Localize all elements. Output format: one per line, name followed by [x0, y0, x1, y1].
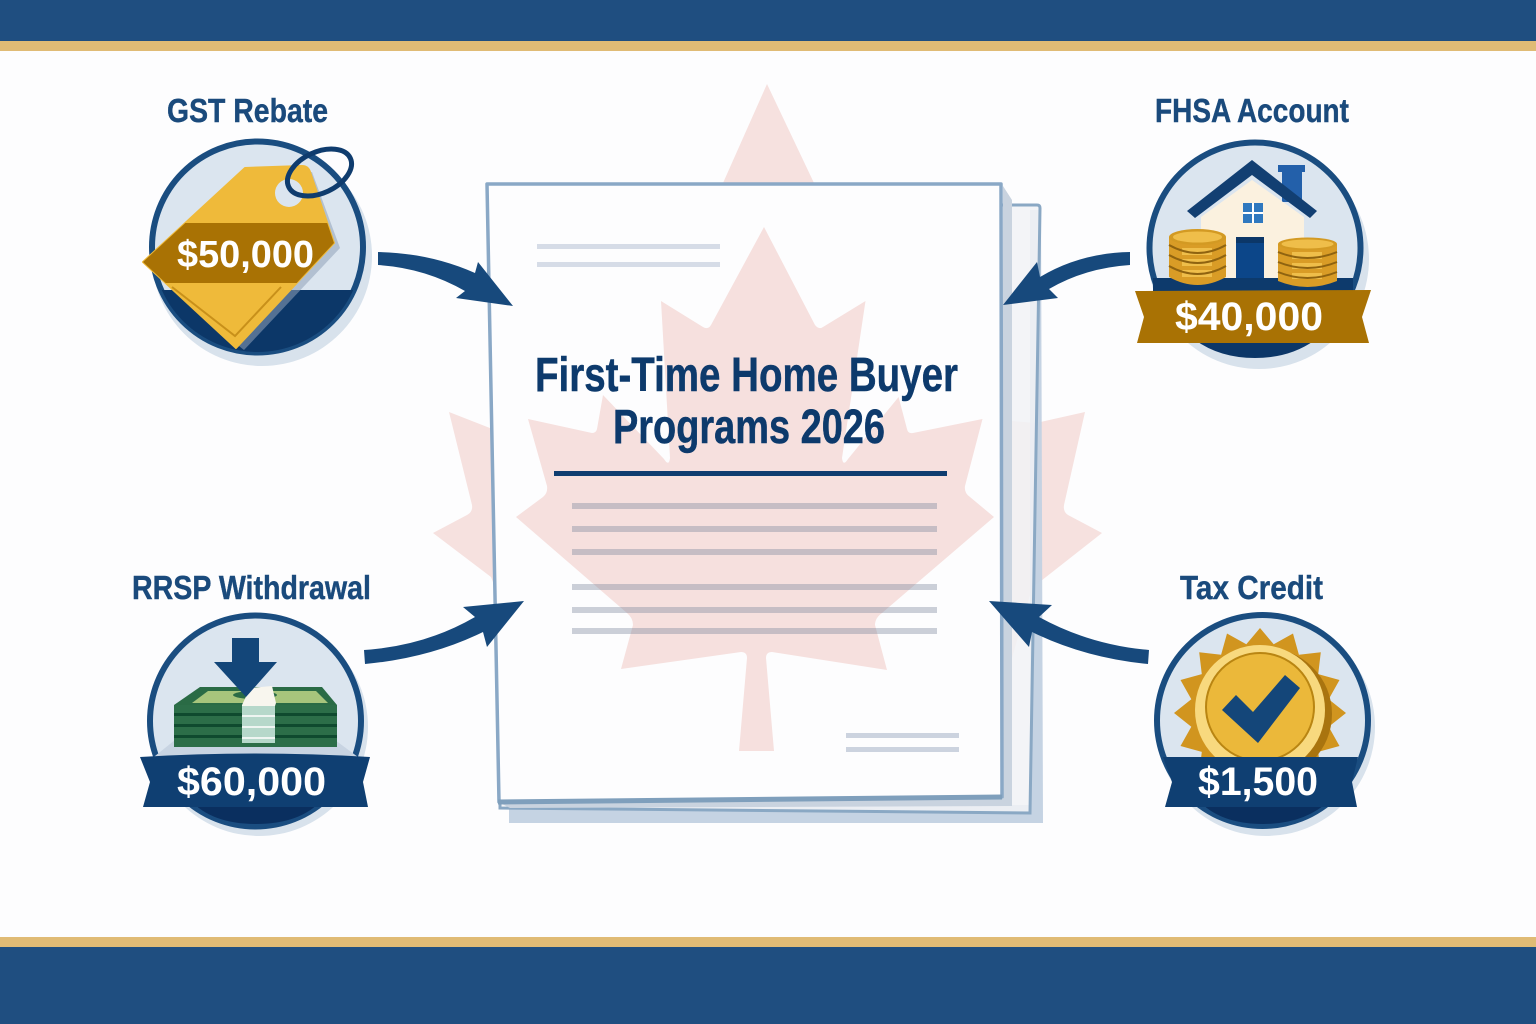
arrow: Tax Credit to document	[989, 601, 1149, 664]
title	[535, 349, 958, 454]
document header lines	[537, 244, 720, 267]
document footer lines	[846, 733, 959, 752]
title: First-Time Home Buyer	[535, 349, 958, 402]
document body lines	[572, 503, 937, 634]
right coin stack	[1278, 238, 1337, 287]
front sheet lower edge	[498, 797, 1002, 802]
left coin stack	[1169, 229, 1226, 285]
central maple leaf	[516, 227, 994, 751]
ribbon	[1135, 290, 1371, 343]
icon: FHSA house and coins badge	[1135, 142, 1371, 369]
label: GST Rebate: GST Rebate	[167, 92, 328, 129]
ribbon	[1163, 757, 1358, 807]
back sheet	[500, 205, 1040, 813]
icon: Tax Credit seal badge	[1157, 615, 1375, 836]
icon: Tax Credit seal badge: $1,500	[1198, 760, 1318, 804]
chimney	[1278, 165, 1305, 202]
icon: GST price tag badge	[140, 140, 372, 366]
icon: RRSP cash stack badge: $60,000	[177, 760, 326, 804]
front sheet	[487, 184, 1002, 802]
down arrow	[214, 638, 277, 697]
check mark	[1222, 675, 1300, 743]
document stack	[487, 184, 1043, 823]
arrow: FHSA to document	[1003, 252, 1130, 305]
label: FHSA Account: FHSA Account	[1155, 92, 1349, 129]
icon: GST price tag badge: $50,000	[177, 234, 314, 276]
label: RRSP Withdrawal: RRSP Withdrawal	[132, 569, 371, 606]
seal burst	[1174, 628, 1346, 799]
title rule	[554, 471, 947, 476]
arrow: RRSP to document	[364, 601, 524, 664]
icon: FHSA house and coins badge: $40,000	[1175, 295, 1323, 339]
house	[1201, 180, 1304, 280]
arrow: GST to document	[378, 252, 513, 306]
label: Tax Credit: Tax Credit	[1180, 569, 1323, 606]
sheet edge shadow	[500, 186, 1012, 808]
background maple leaf	[433, 84, 1102, 700]
price tag	[143, 166, 334, 348]
icon: RRSP cash stack badge	[140, 616, 370, 836]
back sheet shadow	[509, 210, 1043, 823]
bottom banner	[0, 937, 1536, 1024]
cash stack	[174, 687, 337, 705]
title: Programs 2026	[613, 401, 885, 454]
ribbon	[140, 754, 370, 807]
top banner	[0, 0, 1536, 51]
